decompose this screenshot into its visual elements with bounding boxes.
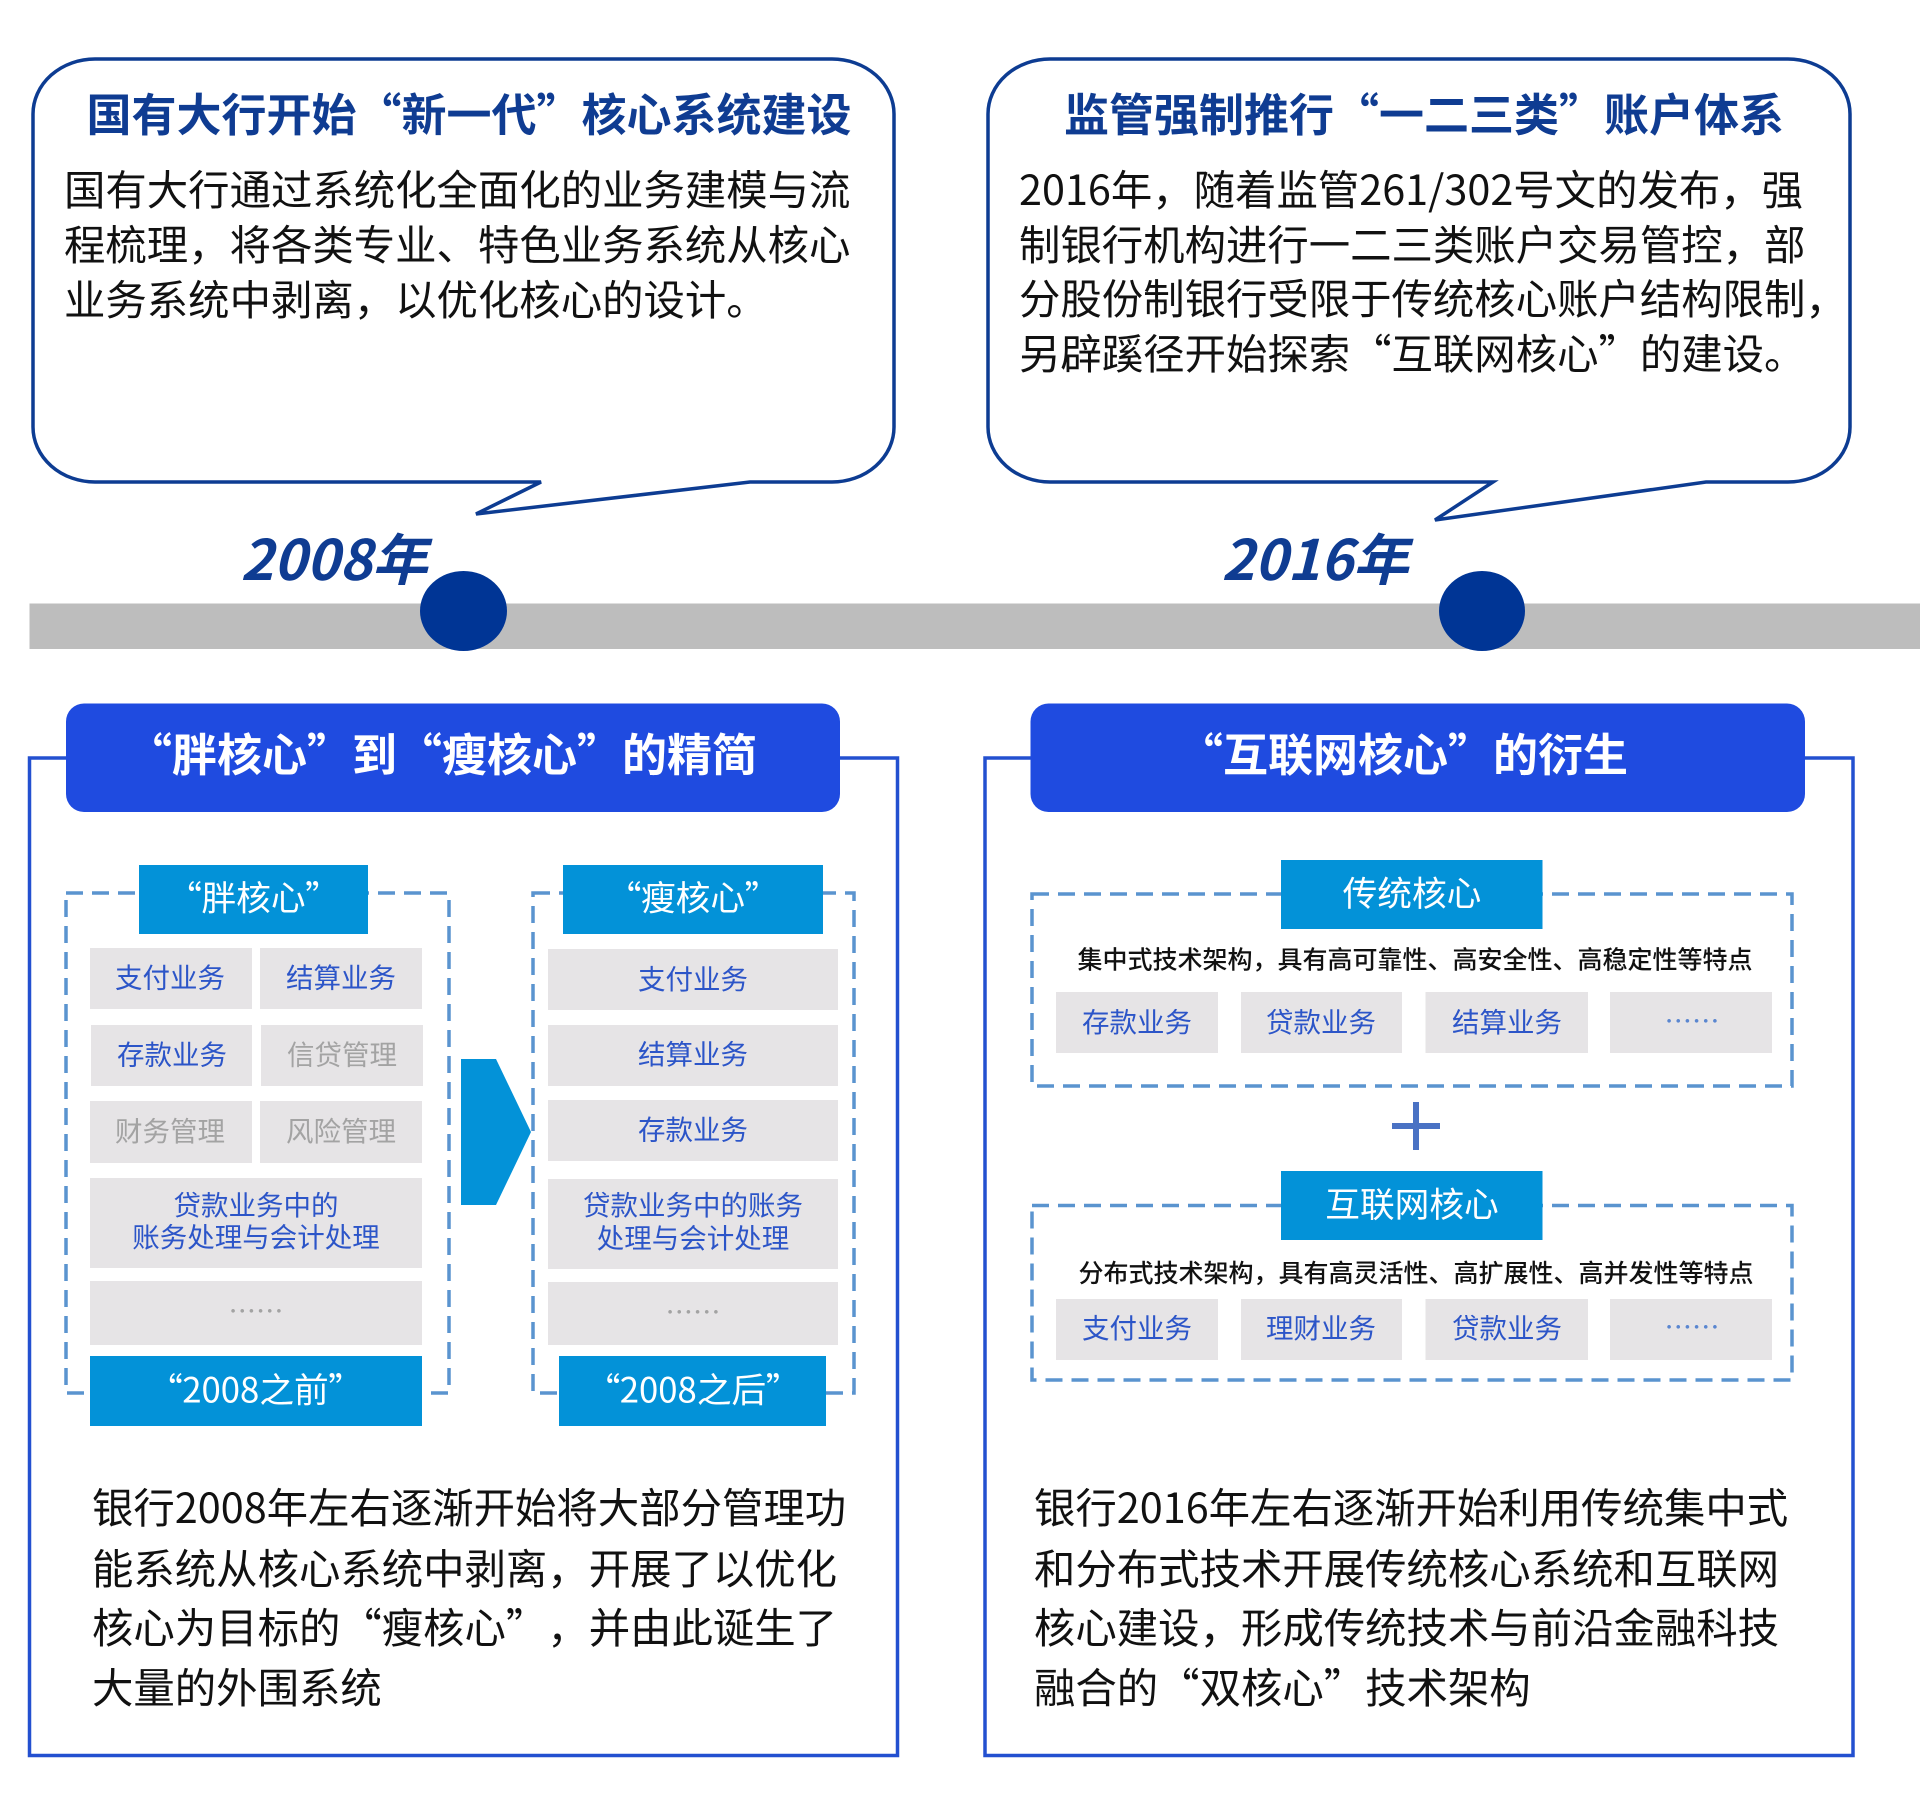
text block: 2008 bubble: 国有大行通过系统化全面化的业务建模与流 <box>64 157 850 217</box>
cell: wide: 贷款业务中的 <box>174 1183 338 1223</box>
cell: ellipsis <box>548 1282 838 1345</box>
text block: left panel summary: 核心为目标的“瘦核心”，并由此诞生了 <box>92 1595 837 1655</box>
text block: 2008 bubble: 程梳理，将各类专业、特色业务系统从核心 <box>64 212 850 272</box>
text block: 2016 bubble: 制银行机构进行一二三类账户交易管控，部 <box>1019 212 1805 272</box>
cell <box>1426 1299 1588 1360</box>
text block: right panel summary: 和分布式技术开展传统核心系统和互联网 <box>1034 1536 1779 1596</box>
text block: right panel summary: 核心建设，形成传统技术与前沿金融科技 <box>1034 1595 1779 1655</box>
cell <box>1056 992 1218 1053</box>
cell: ellipsis: …… <box>228 1289 284 1329</box>
cell <box>548 1025 838 1086</box>
cell: 支付业务 <box>115 956 225 996</box>
cell <box>91 1025 252 1086</box>
group: fat core <box>66 865 449 1426</box>
tag: after 2008: “2008之后” <box>602 1362 784 1412</box>
panel header right: “互联网核心”的衍生 <box>1178 719 1628 784</box>
cell: 结算业务 <box>286 956 396 996</box>
text block: right panel summary <box>1034 1475 1788 1715</box>
text block: left panel summary: 银行2008年左右逐渐开始将大部分管理功 <box>92 1475 846 1535</box>
tag: traditional core: 传统核心 <box>1343 866 1481 916</box>
panel: 2008 speech bubble <box>33 59 894 514</box>
text block: 2016 bubble <box>1019 157 1847 381</box>
bubble outline 2016 <box>988 59 1850 520</box>
plus sign <box>1392 1102 1440 1150</box>
cell <box>1056 1299 1218 1360</box>
tag: thin core: “瘦核心” <box>624 870 762 920</box>
cell: 存款业务 <box>117 1032 227 1072</box>
cell <box>548 949 838 1010</box>
text block: 2016 bubble: 分股份制银行受限于传统核心账户结构限制， <box>1019 266 1847 326</box>
panel header left: “胖核心”到“瘦核心”的精简 <box>127 719 757 784</box>
tag: after 2008 <box>559 1356 826 1426</box>
cell: 支付业务 <box>638 957 748 997</box>
text block: 2016 bubble: 另辟蹊径开始探索“互联网核心”的建设。 <box>1019 321 1805 381</box>
tag: thin core <box>563 865 823 934</box>
cell: wide <box>548 1179 838 1269</box>
year label 2016: 2016年 <box>1222 516 1414 597</box>
cell: ellipsis: …… <box>1664 1305 1720 1345</box>
cell: wide: 处理与会计处理 <box>597 1216 789 1256</box>
cell <box>548 1100 838 1161</box>
cell <box>1426 992 1588 1053</box>
text block: right panel summary: 银行2016年左右逐渐开始利用传统集中式 <box>1034 1475 1788 1535</box>
cell: 信贷管理 <box>287 1032 397 1072</box>
panel: 2016 speech bubble <box>988 59 1850 520</box>
tag: fat core <box>139 865 368 934</box>
cell <box>1241 992 1402 1053</box>
text block: 2008 bubble: 业务系统中剥离，以优化核心的设计。 <box>64 267 768 327</box>
cell: 财务管理 <box>115 1109 225 1149</box>
group: thin core <box>533 865 854 1426</box>
text block: 2016 bubble: 2016年，随着监管261/302号文的发布，强 <box>1019 157 1803 217</box>
cell <box>260 948 422 1009</box>
cell: 结算业务 <box>638 1032 748 1072</box>
arrow <box>461 1059 531 1205</box>
panel frame right <box>985 758 1853 1756</box>
cell: 理财业务 <box>1266 1306 1376 1346</box>
description: 集中式技术架构，具有高可靠性、高安全性、高稳定性等特点 <box>1077 940 1753 976</box>
tag: traditional core <box>1281 860 1542 929</box>
heading: 2016 bubble: 监管强制推行“一二三类”账户体系 <box>1064 79 1784 144</box>
cell: 存款业务 <box>638 1108 748 1148</box>
cell: 贷款业务 <box>1452 1306 1562 1346</box>
group: internet core <box>1032 1171 1792 1380</box>
description: 分布式技术架构，具有高灵活性、高扩展性、高并发性等特点 <box>1078 1254 1754 1290</box>
tag: internet core: 互联网核心 <box>1325 1177 1499 1227</box>
cell <box>260 1101 422 1163</box>
cell: ellipsis <box>1610 992 1772 1053</box>
tag: fat core: “胖核心” <box>184 870 323 920</box>
text block: 2008 bubble <box>64 157 850 327</box>
panel header left <box>66 704 840 812</box>
panel: fat core to thin core <box>30 704 898 1756</box>
timeline node 2016 <box>1439 571 1525 651</box>
cell: wide: 贷款业务中的账务 <box>583 1183 803 1223</box>
panel: internet core derivation <box>985 704 1853 1756</box>
cell <box>261 1025 423 1086</box>
bubble outline 2008 <box>33 59 894 514</box>
panel header right <box>1030 704 1805 812</box>
cell: 存款业务 <box>1082 1000 1192 1040</box>
text block: left panel summary: 大量的外围系统 <box>92 1655 382 1715</box>
cell: ellipsis <box>90 1281 422 1345</box>
heading: 2008 bubble: 国有大行开始“新一代”核心系统建设 <box>86 79 852 144</box>
year label 2008: 2008年 <box>240 516 433 597</box>
timeline bar <box>30 604 1920 649</box>
cell <box>1241 1299 1402 1360</box>
tag: before 2008 <box>90 1356 422 1426</box>
text block: right panel summary: 融合的“双核心”技术架构 <box>1034 1655 1531 1715</box>
cell: ellipsis <box>1610 1299 1772 1360</box>
text block: left panel summary: 能系统从核心系统中剥离，开展了以优化 <box>92 1536 837 1596</box>
cell: 风险管理 <box>286 1109 396 1149</box>
timeline node 2008 <box>420 571 507 651</box>
cell <box>90 948 252 1009</box>
tag: internet core <box>1281 1171 1542 1240</box>
cell: wide <box>90 1178 422 1268</box>
cell: wide: 账务处理与会计处理 <box>132 1215 380 1255</box>
tag: before 2008: “2008之前” <box>165 1362 346 1412</box>
cell: ellipsis: …… <box>1664 999 1720 1039</box>
panel frame left <box>30 758 898 1756</box>
text block: left panel summary <box>92 1475 846 1715</box>
cell <box>90 1101 252 1163</box>
group: traditional core <box>1032 860 1792 1086</box>
cell: 结算业务 <box>1452 1000 1562 1040</box>
cell: 贷款业务 <box>1266 1000 1376 1040</box>
cell: 支付业务 <box>1082 1306 1192 1346</box>
cell: ellipsis: …… <box>666 1290 720 1330</box>
